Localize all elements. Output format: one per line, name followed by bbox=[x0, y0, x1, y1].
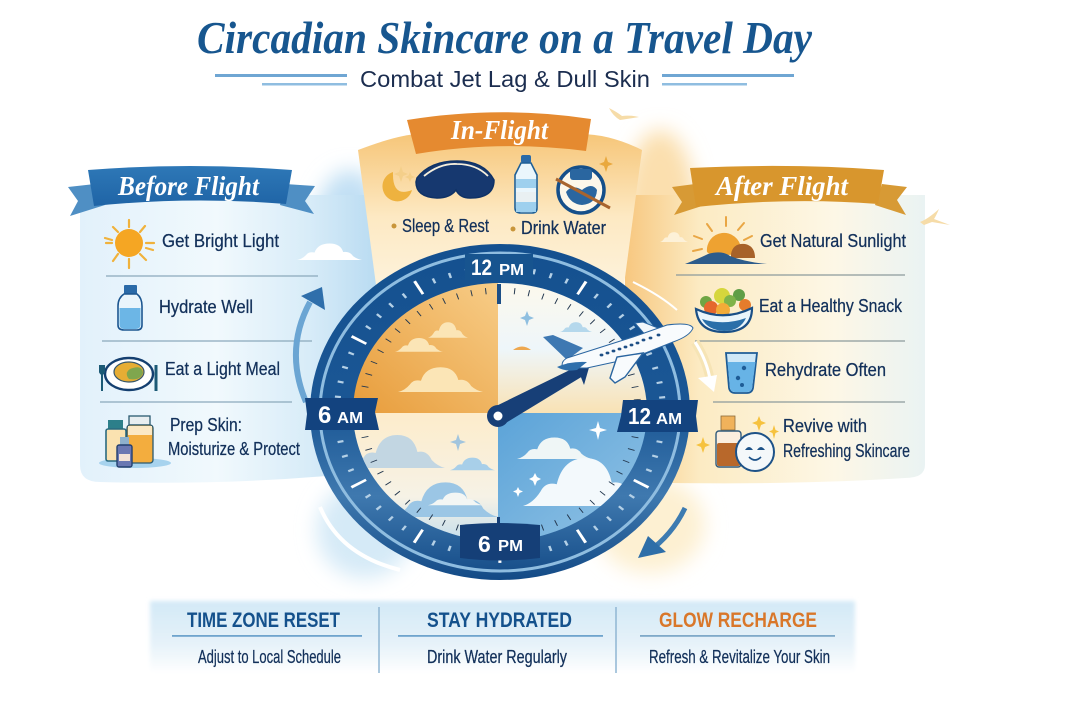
clock bbox=[305, 244, 698, 580]
label: refreshing skincare: Refreshing Skincare bbox=[783, 441, 910, 461]
arrow: before flight upward arrow bbox=[296, 287, 325, 402]
panel: after flight bbox=[625, 166, 925, 483]
before flight ribbon bbox=[68, 166, 315, 216]
icon: skincare bottles bbox=[99, 416, 171, 468]
hour label: 6 PM bbox=[460, 517, 540, 560]
summary: time zone reset: Adjust to Local Schedule bbox=[198, 647, 341, 667]
label: eat a light meal: Eat a Light Meal bbox=[165, 359, 280, 379]
summary: stay hydrated bbox=[398, 609, 603, 667]
label: get natural sunlight: Get Natural Sunlight bbox=[760, 231, 906, 251]
row dividers bbox=[676, 275, 905, 402]
icon: moon and stars bbox=[382, 166, 415, 201]
hour label: 6 AM bbox=[305, 398, 379, 430]
title: Circadian Skincare on a Travel Day bbox=[197, 12, 813, 63]
after flight ribbon bbox=[672, 166, 907, 215]
icon: plate and cutlery bbox=[100, 358, 156, 391]
infographic canvas bbox=[68, 22, 950, 673]
center panel card bbox=[358, 134, 642, 300]
clock bezel bbox=[310, 244, 690, 580]
subtitle bbox=[215, 66, 794, 92]
summary: glow recharge: GLOW RECHARGE bbox=[659, 609, 817, 632]
panel: bottom summary band bbox=[150, 601, 855, 673]
summary: time zone reset: TIME ZONE RESET bbox=[187, 609, 340, 632]
summary: glow recharge: Refresh & Revitalize Your Skin bbox=[649, 647, 830, 667]
row dividers bbox=[100, 276, 318, 402]
label: rehydrate often: Rehydrate Often bbox=[765, 360, 886, 380]
icon: sleep mask bbox=[416, 161, 494, 198]
icon: no device bbox=[556, 156, 613, 213]
panel: in-flight bbox=[358, 112, 642, 300]
subtitle: Combat Jet Lag & Dull Skin bbox=[360, 66, 650, 92]
summary: stay hydrated: STAY HYDRATED bbox=[427, 609, 572, 632]
hour label: 12 PM bbox=[465, 254, 533, 280]
right panel card bbox=[625, 195, 925, 483]
arrow: after flight downward arrow bbox=[695, 342, 717, 392]
icon: water bottle bbox=[118, 285, 142, 330]
icon: sun bbox=[105, 220, 154, 268]
icon: salad bowl bbox=[696, 288, 752, 332]
hour label: 12 AM bbox=[617, 400, 698, 432]
label: moisturize and protect: Moisturize & Protect bbox=[168, 439, 300, 459]
label: eat a healthy snack: Eat a Healthy Snack bbox=[759, 296, 903, 316]
summary: stay hydrated: Drink Water Regularly bbox=[427, 647, 567, 667]
summary: time zone reset bbox=[172, 609, 362, 667]
label: hydrate well: Hydrate Well bbox=[159, 297, 253, 317]
in-flight ribbon bbox=[407, 112, 591, 154]
icon: sunrise over hills bbox=[685, 217, 767, 264]
label: prep skin: Prep Skin: bbox=[170, 415, 242, 435]
after flight ribbon: After Flight bbox=[714, 171, 849, 201]
icon: water glass bbox=[726, 353, 757, 393]
hour label: 6 PM: PM bbox=[498, 538, 523, 555]
arrow: lower right return arrow bbox=[638, 508, 685, 558]
icon: airplane bbox=[543, 282, 693, 383]
hour label: 6 PM: 6 bbox=[478, 531, 491, 557]
label: sleep and rest: Sleep & Rest bbox=[402, 216, 489, 236]
label: revive with: Revive with bbox=[783, 416, 867, 436]
band background bbox=[150, 601, 855, 673]
panel: before flight bbox=[68, 166, 385, 483]
in-flight ribbon: In-Flight bbox=[450, 115, 549, 145]
hour label: 12 PM: PM bbox=[499, 262, 524, 279]
label: get bright light: Get Bright Light bbox=[162, 231, 279, 251]
label: drink water: Drink Water bbox=[521, 218, 606, 238]
hour label: 12 PM: 12 bbox=[471, 255, 492, 280]
hour label: 12 AM: AM bbox=[656, 411, 682, 428]
icon: skincare bottle and face bbox=[696, 416, 779, 471]
hour label: 6 AM: AM bbox=[337, 410, 363, 427]
before flight ribbon: Before Flight bbox=[117, 171, 260, 201]
birds bbox=[609, 108, 950, 225]
clock hand bbox=[487, 364, 590, 427]
summary: glow recharge bbox=[640, 609, 835, 667]
left panel card bbox=[80, 195, 385, 483]
hour label: 12 AM: 12 bbox=[628, 403, 651, 429]
tick at twelve bbox=[497, 284, 501, 304]
hour label: 6 AM: 6 bbox=[318, 402, 331, 429]
clock face bbox=[354, 283, 646, 536]
icon: water bottle bbox=[515, 155, 537, 213]
decorative clouds beside clock bbox=[297, 232, 688, 260]
